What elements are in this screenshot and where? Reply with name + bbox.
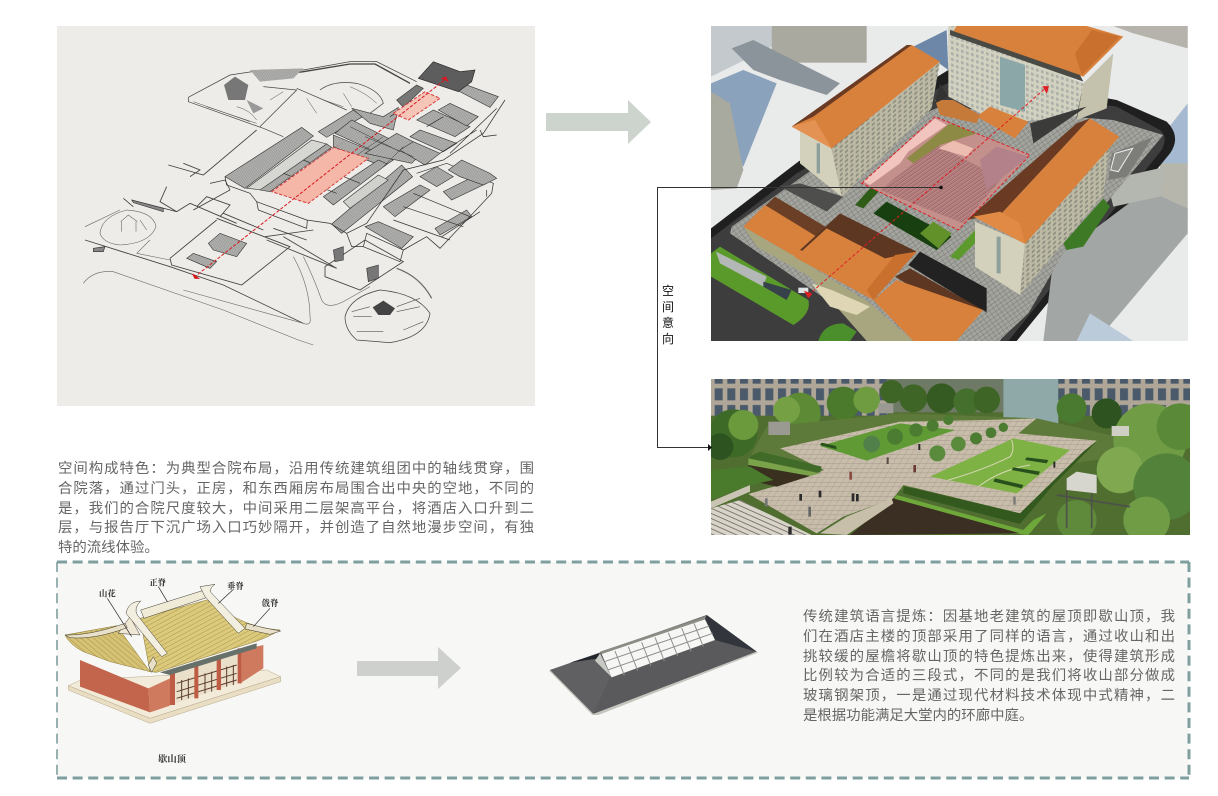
ghost building over road, right (1043, 190, 1188, 341)
steps and stair edge (711, 485, 893, 535)
front court outlines (85, 130, 403, 323)
glass skylight (595, 616, 715, 677)
right wing building (967, 118, 1133, 295)
text block: spatial composition: 层，与报告厅下沉广场入口巧妙隔开，并创造了自然地漫步空间，有独 (58, 520, 534, 536)
road curves (83, 240, 432, 345)
label: 空间意向: 向 (662, 332, 674, 346)
text block: traditional language: 是根据功能满足大堂内的环廊中庭。 (803, 708, 1033, 724)
gable and ridges (65, 584, 281, 672)
small pavilion in garden (224, 68, 303, 113)
red walls and lattice front (80, 643, 263, 712)
lawns with trees (820, 415, 1070, 493)
paved ground (730, 107, 1163, 341)
red courtyard zone (862, 117, 1030, 230)
left wing building (792, 45, 940, 197)
text block: traditional language: 挑较缓的屋檐将歇山顶的特色提炼出来，使得建筑形成 (803, 648, 1175, 664)
red courtyards (272, 92, 440, 203)
text block: traditional language: 们在酒店主楼的顶部采用了同样的语言，通过收山和出 (803, 629, 1175, 645)
text block: spatial composition: 合院落，通过门头，正房，和东西厢房布局围合出中央的空地，不同的 (58, 481, 534, 497)
label: 空间意向: 意 (662, 316, 674, 330)
roof part labels: 戗脊 (262, 598, 279, 608)
roof slopes (65, 600, 280, 672)
illustration: traditional xieshan roof (64, 578, 281, 765)
arrow: traditional roof to modern roof (357, 647, 461, 689)
left pond pavilion (85, 210, 156, 245)
roofs of the main compound (225, 85, 498, 248)
steel tower (768, 403, 1130, 528)
text block: traditional language: 比例较为合适的三段式，不同的是我们将收山部分做成 (803, 668, 1175, 684)
text block: spatial composition: 特的流线体验。 (58, 540, 159, 556)
roof part labels (99, 578, 279, 765)
text block: spatial composition: 是，我们的合院尺度较大，中间采用二层架高平台，将酒店入口升到二 (58, 500, 534, 516)
road ring (711, 70, 1175, 341)
roof part labels: 垂脊 (227, 581, 244, 591)
foreground trees (707, 403, 1203, 543)
lower pond with pavilion (345, 290, 430, 343)
panel: aerial render of hotel (711, 26, 1188, 341)
text block: traditional language (803, 608, 1175, 724)
red dashed axis and court outline (805, 87, 1048, 297)
low ground behind plaza (750, 413, 1117, 490)
text block: traditional language: 传统建筑语言提炼：因基地老建筑的屋顶即歇山顶，我 (803, 609, 1175, 625)
front podium building (743, 197, 1007, 341)
roof slopes (549, 615, 758, 717)
text block: traditional language: 玻璃钢架顶，一是通过现代材料技术体现中式精神，二 (803, 688, 1175, 704)
tree line (773, 380, 1122, 434)
roof part labels: 歇山顶 (158, 753, 187, 765)
plaza deck (748, 418, 1097, 533)
panel: courtyard axonometric sketch (57, 26, 535, 406)
roof part labels: 山花 (99, 589, 116, 599)
green lawn and dark courtyard garden (855, 188, 1110, 260)
panel: roof garden render (711, 379, 1190, 535)
people on deck (765, 444, 1055, 535)
red axis arrow (193, 77, 448, 278)
leader lines (107, 587, 270, 637)
label: 空间意向 (662, 284, 674, 346)
front gate buildings (93, 200, 378, 282)
illustration: modern glass roof model (550, 615, 758, 715)
roof part labels: 正脊 (149, 578, 167, 588)
upper garden outline (188, 62, 417, 137)
text block: spatial composition (58, 460, 534, 556)
side pavilion (448, 160, 497, 185)
entry road green strip (711, 247, 857, 341)
connector arrow: 空间意向 (657, 186, 943, 451)
rear pavilion (418, 62, 475, 92)
label: 空间意向: 空 (662, 284, 674, 298)
panel: bottom dashed band (56, 560, 1190, 780)
stone base (68, 670, 281, 723)
background buildings (711, 379, 1190, 426)
text block: spatial composition: 空间构成特色：为典型合院布局，沿用传统建筑组团中的轴线贯穿，围 (58, 461, 534, 477)
surrounding ghost buildings and shadows (711, 26, 1188, 220)
arrow: sketch to aerial render (546, 100, 651, 144)
top tower (935, 26, 1123, 143)
label: 空间意向: 间 (662, 300, 674, 314)
compound walls (193, 93, 505, 262)
hedges and lower green edge (748, 442, 1097, 535)
